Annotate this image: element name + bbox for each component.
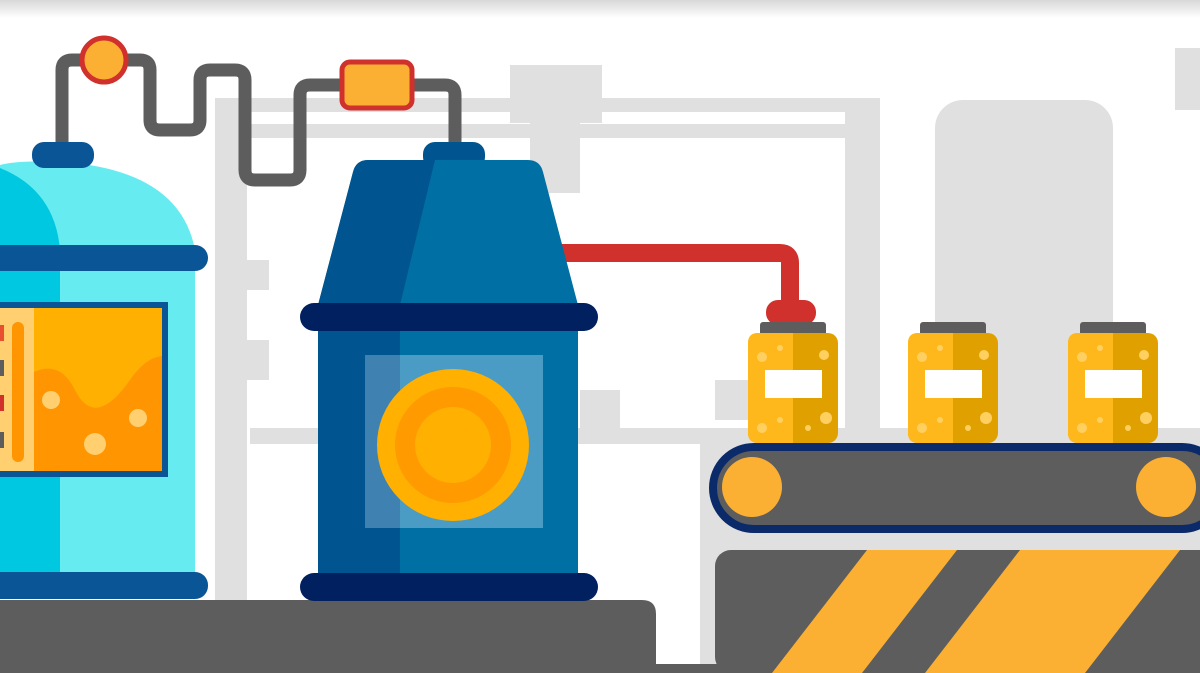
top fade band [0, 0, 1200, 18]
blue tank window [365, 355, 543, 528]
tank window [0, 302, 168, 477]
striped base [715, 550, 1200, 673]
gray pipe with gauge and valve [62, 38, 455, 180]
jars [748, 322, 1158, 443]
conveyor belt [713, 447, 1200, 529]
icon: gauge [82, 38, 126, 82]
floor [0, 600, 656, 673]
icon: valve [342, 62, 412, 108]
background machinery silhouettes [215, 48, 1200, 673]
left tank [0, 142, 208, 599]
red pipe [560, 253, 816, 325]
blue tank [300, 142, 598, 601]
